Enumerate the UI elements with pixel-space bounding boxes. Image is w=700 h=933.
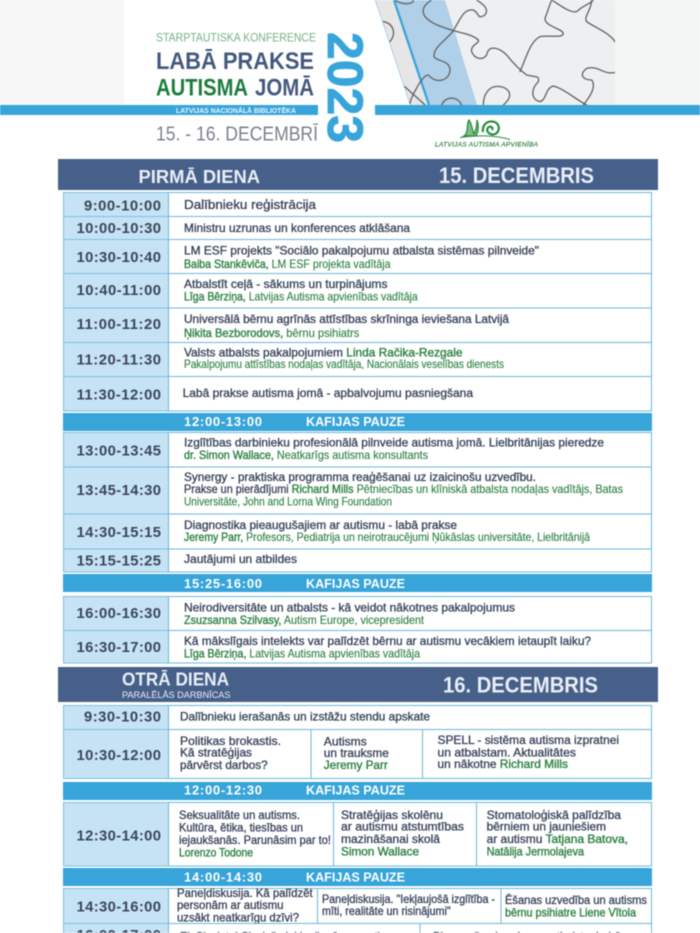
session: Stomatoloģiskā palīdzība: Stomatoloģiskā palīdzība: [487, 809, 622, 822]
row 9:00-10:00: 9:00-10:00: [84, 199, 161, 215]
session: Paneļdiskusija neatkarīga dzīve: Paneļdiskusija. Kā palīdzēt: [177, 887, 313, 900]
session: Politikas brokastis: pārvērst darbos?: [180, 759, 268, 772]
coffee break 14:00-14:30: 14:00-14:30: [184, 870, 262, 884]
row 13:00-13:45: Izglītības darbinieku profesionālā pilnveide autisma jomā. Lielbritānijas pieredze: [184, 437, 604, 450]
row 11:00-11:20: Universālā bērnu agrīnās attīstības skrīninga ieviešana Latvijā: [184, 313, 509, 326]
session: Politikas brokastis: [180, 735, 281, 772]
row 11:20-11:30: [64, 342, 652, 376]
icon: snail spiral with figure: [460, 120, 510, 140]
row 11:00-11:20: Ņikita Bezborodovs, bērnu psihiatrs: [184, 327, 360, 340]
blue band right: [375, 105, 700, 115]
session: Stratēģijas skolēnu: mazināšanai skolā: [341, 833, 441, 846]
row 11:20-11:30: Valsts atbalsts pakalpojumiem Linda Račika-Rezgale: [184, 347, 462, 360]
row 14:30-15:15: Diagnostika pieaugušajiem ar autismu - labā prakse: [184, 519, 457, 532]
coffee break 12:00-12:30: KAFIJAS PAUZE: [306, 782, 405, 798]
venue: LATVIJAS NACIONĀLĀ BIBLIOTĒKA: [176, 106, 297, 115]
coffee break 12:00-13:00: 12:00-13:00: [184, 414, 262, 429]
blue band left: [0, 105, 318, 115]
row 16:00-17:00 clipped at page bottom: [64, 924, 652, 933]
date label: 15. DECEMBRIS: [439, 163, 594, 188]
session: Stomatoloģiskā palīdzība: bērniem un jauniešiem: [487, 821, 606, 834]
row 10:30-10:40: Baiba Stankēviča, LM ESF projekta vadītāja: [184, 258, 391, 271]
session: Politikas brokastis: Kā stratēģijas: [180, 747, 252, 760]
session: Stomatoloģiskā palīdzība: Natālija Jermolajeva: [487, 846, 584, 859]
row 10:00-10:30: 10:00-10:30: [76, 221, 161, 237]
row 12:30-14:00 parallel sessions: [64, 802, 652, 866]
row 15:15-15:25: [64, 549, 652, 572]
row 10:40-11:00: Atbalstīt ceļā - sākums un turpinājums: [184, 278, 388, 291]
row 13:45-14:30: 13:45-14:30: [76, 483, 161, 499]
row 13:00-13:45: 13:00-13:45: [76, 444, 161, 460]
row 10:30-12:00 parallel sessions: 10:30-12:00: [76, 748, 161, 764]
row 9:30-10:30: Dalībnieku ierašanās un izstāžu stendu apskate: [180, 711, 430, 724]
session: Paneļdiskusija iekļaujošā izglītība: [322, 893, 495, 918]
row 10:40-11:00: Līga Bērziņa, Latvijas Autisma apvienības vadītāja: [184, 291, 418, 304]
session: SPELL: un atbalstam. Aktualitātes: [438, 746, 576, 759]
row 15:15-15:25: Jautājumi un atbildes: [184, 553, 297, 566]
year 2023 vertical: 2023: [317, 32, 373, 143]
coffee break 12:00-13:00: [63, 413, 652, 431]
row 16:00-16:30: Zsuzsanna Szilvasy, Autism Europe, vicepresident: [184, 614, 425, 627]
session: Paneļdiskusija iekļaujošā izglītība: mīti, realitāte un risinājumi": [322, 905, 451, 918]
coffee break 12:00-13:00: KAFIJAS PAUZE: [306, 414, 405, 429]
session: SPELL: SPELL - sistēma autisma izpratnei: [438, 734, 619, 747]
logo text: LATVIJAS AUTISMA APVIENĪBA: [435, 141, 539, 149]
session: Paneļdiskusija neatkarīga dzīve: uzsākt neatkarīgu dzīvi?: [177, 912, 299, 925]
day label: PIRMĀ DIENA: [138, 166, 260, 187]
puzzle image: [370, 0, 620, 105]
row 10:30-10:40: 10:30-10:40: [76, 250, 161, 266]
session: Autisms un trauksme: Jeremy Parr: [324, 759, 388, 772]
session: Autisms un trauksme: un trauksme: [324, 747, 389, 760]
row 9:30-10:30: [64, 706, 652, 730]
sub label: PARALĒLĀS DARBNĪCAS: [122, 690, 230, 701]
row 16:30-17:00: 16:30-17:00: [76, 640, 161, 656]
row 13:45-14:30: Universitāte, John and Lorna Wing Foundation: [184, 496, 392, 509]
row 16:30-17:00: [64, 630, 652, 663]
session: Seksualitāte un autisms: Seksualitāte un autisms.: [179, 809, 300, 822]
session: Stratēģijas skolēnu: Simon Wallace: [341, 846, 419, 859]
coffee break 15:25-16:00: KAFIJAS PAUZE: [306, 576, 405, 591]
session: Seksualitāte un autisms: iejaukšanās. Parunāsim par to!: [179, 834, 331, 847]
date label: 16. DECEMBRIS: [443, 673, 598, 698]
coffee break 12:00-12:30: 12:00-12:30: [184, 782, 262, 798]
row 16:00-16:30: 16:00-16:30: [76, 606, 161, 622]
row 16:30-17:00: Kā mākslīgais intelekts var palīdzēt bērnu ar autismu vecākiem ietaupīt laiku?: [184, 635, 592, 648]
coffee break 14:00-14:30: KAFIJAS PAUZE: [306, 870, 405, 884]
row 14:30-16:00 parallel sessions: [64, 887, 652, 925]
session: Ēšanas uzvedība: bērnu psihiatre Liene Vītola: [505, 907, 636, 920]
row 10:40-11:00: 10:40-11:00: [76, 283, 161, 299]
session: Seksualitāte un autisms: Kultūra, ētika, tiesības un: [179, 822, 303, 835]
session: SPELL: un nākotne Richard Mills: [438, 758, 568, 771]
session: Stomatoloģiskā palīdzība: [487, 809, 628, 859]
row 16:00-16:30: [64, 596, 652, 630]
session: Seksualitāte un autisms: [179, 809, 331, 860]
logo: Latvijas Autisma apvienība: [435, 120, 539, 149]
session: Stratēģijas skolēnu: [341, 809, 464, 859]
row 11:30-12:00: [64, 376, 652, 411]
row 10:30-10:40: LM ESF projekts "Sociālo pakalpojumu atbalsta sistēmas pilnveide": [184, 244, 539, 258]
row 10:30-10:40: [64, 240, 652, 274]
row 15:15-15:25: 15:15-15:25: [76, 554, 161, 570]
row 10:40-11:00: [64, 274, 652, 308]
session: Ēšanas uzvedība: [505, 894, 647, 920]
session: Paneļdiskusija neatkarīga dzīve: personām ar autismu: [177, 899, 284, 912]
row 14:30-15:15: Jeremy Parr, Profesors, Pediatrija un neirotraucējumi Ņūkāslas universitāte, Lielbritānijā: [184, 531, 590, 544]
coffee break 15:25-16:00: 15:25-16:00: [184, 576, 262, 591]
row 14:30-15:15: 14:30-15:15: [76, 525, 161, 541]
coffee break 15:25-16:00: [63, 574, 652, 592]
row 13:00-13:45: [64, 432, 652, 467]
session: Autisms un trauksme: Autisms: [324, 736, 367, 749]
row 11:00-11:20: [64, 308, 652, 342]
coffee break 12:00-12:30: [63, 782, 652, 800]
row 10:30-12:00 parallel sessions: [64, 730, 652, 778]
row 10:00-10:30: [64, 216, 652, 240]
row 9:00-10:00: Dalībnieku reģistrācija: [184, 198, 316, 212]
session: Paneļdiskusija iekļaujošā izglītība: Paneļdiskusija. "Iekļaujošā izglītība -: [322, 893, 495, 906]
row 14:30-16:00 parallel sessions: 14:30-16:00: [76, 900, 161, 916]
row 13:00-13:45: dr. Simon Wallace, Neatkarīgs autisma konsultants: [184, 449, 428, 462]
row 14:30-15:15: [64, 514, 652, 549]
session: Seksualitāte un autisms: Lorenzo Todone: [179, 847, 253, 860]
session: Autisms un trauksme: [324, 736, 389, 772]
row 13:45-14:30: [64, 467, 652, 514]
row 11:30-12:00: 11:30-12:00: [76, 388, 161, 404]
row 13:45-14:30: Prakse un pierādījumi Richard Mills Pētniecības un klīniskā atbalsta nodaļas vadītājs, Batas: [184, 483, 623, 496]
header band: conference banner: [0, 0, 700, 115]
row 11:00-11:20: 11:00-11:20: [76, 317, 161, 333]
row 10:00-10:30: Ministru uzrunas un konferences atklāšana: [184, 222, 411, 235]
title line 2 end: JOMĀ: [255, 75, 314, 102]
session: Ēšanas uzvedība: Ēšanas uzvedība un autisms: [505, 894, 647, 907]
day label: OTRĀ DIENA: [122, 670, 229, 690]
row 11:30-12:00: Labā prakse autisma jomā - apbalvojumu pasniegšana: [183, 387, 473, 400]
row 11:20-11:30: Pakalpojumu attīstības nodaļas vadītāja, Nacionālais veselības dienests: [184, 358, 504, 371]
row 16:30-17:00: Līga Bērziņa, Latvijas Autisma apvienības vadītāja: [184, 648, 420, 661]
day 2 heading bar: [58, 667, 658, 702]
title line 2: AUTISMA: [156, 75, 248, 102]
row 9:00-10:00: [64, 192, 652, 216]
row 9:30-10:30: 9:30-10:30: [84, 710, 161, 726]
kicker: STARPTAUTISKA KONFERENCE: [156, 33, 316, 45]
session: Politikas brokastis: Politikas brokastis.: [180, 735, 281, 748]
session: Paneļdiskusija neatkarīga dzīve: [177, 887, 313, 925]
coffee break 14:00-14:30: [63, 868, 652, 886]
session: SPELL: [438, 734, 619, 771]
row 11:20-11:30: 11:20-11:30: [76, 353, 161, 369]
session: Stratēģijas skolēnu: Stratēģijas skolēnu: [341, 809, 443, 822]
title line 1: LABĀ PRAKSE: [156, 48, 314, 75]
session: Stratēģijas skolēnu: ar autismu atstumtības: [341, 821, 464, 834]
row 12:30-14:00 parallel sessions: 12:30-14:00: [76, 829, 161, 845]
conference title block: [156, 33, 318, 146]
dates: 15. - 16. DECEMBRĪ: [156, 123, 318, 146]
session: Stomatoloģiskā palīdzība: ar autismu Tatjana Batova,: [487, 833, 628, 846]
row 16:00-16:30: Neirodiversitāte un atbalsts - kā veidot nākotnes pakalpojumus: [184, 602, 515, 615]
row 13:45-14:30: Synergy - praktiska programma reaģēšanai uz izaicinošu uzvedību.: [184, 471, 536, 484]
day 1 heading bar: [58, 159, 658, 190]
